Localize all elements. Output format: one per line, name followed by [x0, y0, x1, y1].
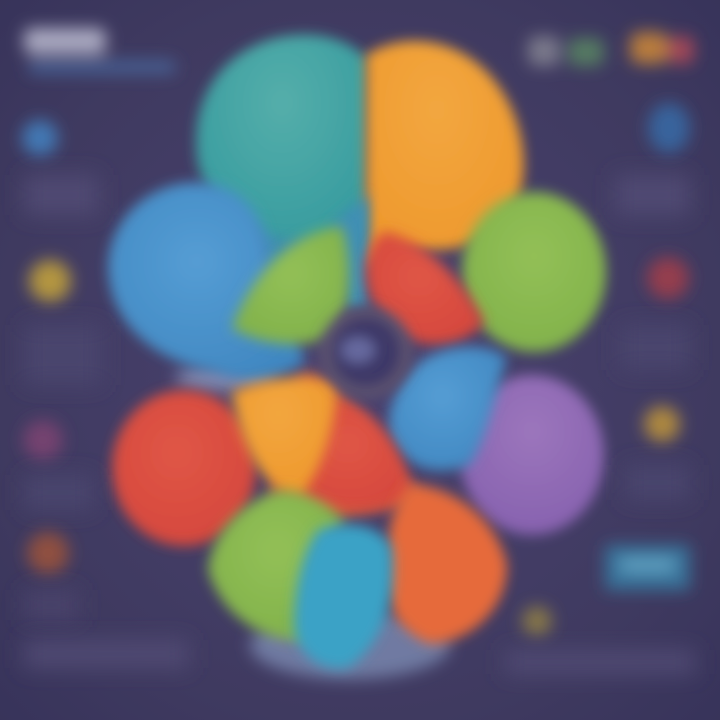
petal: orange small: [232, 378, 335, 498]
text block 1: [24, 175, 99, 215]
text block 4: [24, 590, 79, 620]
petal: purple: [460, 375, 604, 535]
petal: blue left: [108, 182, 305, 380]
text block 3: [625, 465, 690, 500]
icon: blue: [648, 103, 690, 153]
center hub: [320, 306, 412, 398]
text block 2: [24, 325, 102, 385]
glow: between blue and red: [175, 364, 275, 392]
petal: green right: [462, 192, 606, 352]
petal: green bottom: [208, 490, 345, 641]
petal: green leaf: [232, 226, 349, 344]
badge: blue callout: [605, 545, 690, 590]
icon: red: [647, 257, 689, 299]
petal: teal-blue sliver: [330, 195, 368, 310]
title block: [24, 28, 176, 74]
petal: red left: [112, 390, 256, 546]
text block 3: [24, 475, 94, 510]
flower diagram: [108, 35, 606, 679]
underlay: upper gaps: [250, 200, 340, 330]
legend: top right swatches: [528, 32, 694, 66]
petal: grey base: [250, 611, 450, 679]
underlay: lower gaps: [270, 370, 420, 520]
petal: blue bottom: [294, 524, 393, 669]
petal: teal: [196, 35, 368, 262]
icon: orange-brown: [27, 532, 69, 574]
icon: blue: [22, 120, 58, 156]
footer text left: [24, 640, 189, 668]
petal: red center: [295, 400, 412, 510]
text block 2: [620, 325, 690, 370]
text block 1: [615, 175, 690, 215]
petal: red upper: [366, 232, 484, 345]
petal: blue right: [389, 346, 507, 471]
petal: orange: [366, 41, 524, 270]
right column: [505, 103, 695, 674]
petal: orange-red bottom: [385, 484, 507, 644]
footer text right: [505, 650, 695, 674]
icon: yellow: [29, 260, 71, 302]
icon: small yellow: [522, 606, 552, 636]
icon: magenta: [23, 420, 63, 460]
icon: yellow-orange: [644, 406, 680, 442]
left column: [22, 120, 189, 668]
